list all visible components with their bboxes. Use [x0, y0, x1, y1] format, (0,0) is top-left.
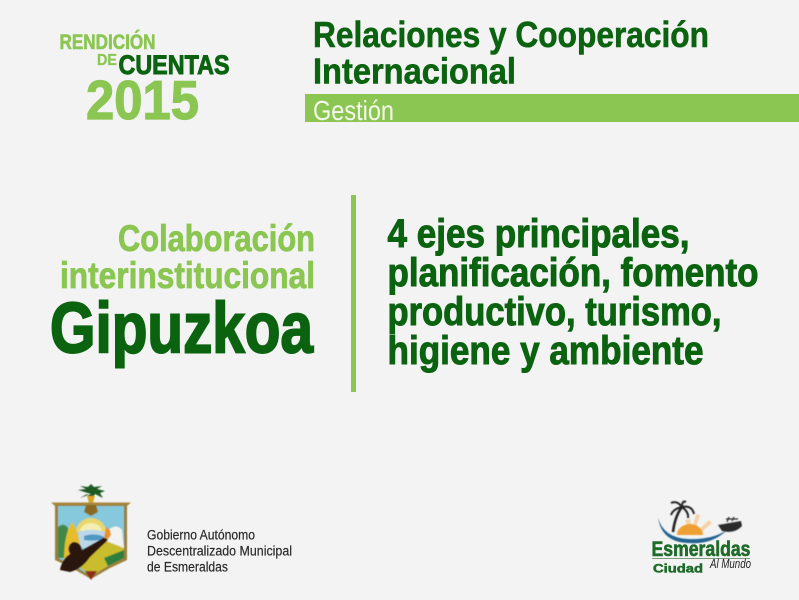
text: institution name: de Esmeraldas	[147, 560, 228, 574]
logo: Esmeraldas Ciudad Al Mundo: Al Mundo	[709, 556, 751, 571]
logo: Rendición de Cuentas 2015: CUENTAS	[118, 50, 230, 80]
text block: 4 ejes: 4 ejes principales,	[388, 212, 690, 256]
heading: Colaboración interinstitucional Gipuzkoa	[50, 218, 315, 368]
icon: coat of arms	[51, 484, 131, 580]
text block: 4 ejes	[388, 212, 758, 373]
text: institution name: Gobierno Autónomo	[147, 528, 255, 542]
logo: Rendición de Cuentas 2015: 2015	[86, 69, 199, 131]
heading: Colaboración interinstitucional Gipuzkoa: interinstitucional	[60, 255, 315, 296]
title: Relaciones y Cooperación	[313, 14, 709, 55]
logo: Esmeraldas Ciudad Al Mundo: Ciudad	[653, 562, 703, 576]
vertical divider	[351, 195, 356, 392]
text: institution name	[147, 528, 292, 574]
heading: Colaboración interinstitucional Gipuzkoa: Gipuzkoa	[50, 290, 313, 368]
section bar: Gestión: Gestión	[313, 95, 394, 126]
heading: Colaboración interinstitucional Gipuzkoa: Colaboración	[118, 218, 315, 259]
text block: 4 ejes: higiene y ambiente	[388, 329, 704, 373]
title	[313, 14, 709, 92]
text block: 4 ejes: productivo, turismo,	[388, 290, 722, 334]
section bar: Gestión	[305, 94, 799, 126]
logo: Rendición de Cuentas 2015: DE	[97, 52, 117, 69]
logo: Rendición de Cuentas 2015: RENDICIÓN	[60, 30, 156, 54]
logo: Esmeraldas Ciudad Al Mundo: Esmeraldas	[652, 538, 750, 561]
title: Internacional	[313, 50, 516, 92]
logo: Rendición de Cuentas 2015	[60, 30, 230, 131]
logo: Esmeraldas Ciudad Al Mundo	[652, 502, 751, 576]
text: institution name: Descentralizado Municipal	[147, 544, 292, 558]
